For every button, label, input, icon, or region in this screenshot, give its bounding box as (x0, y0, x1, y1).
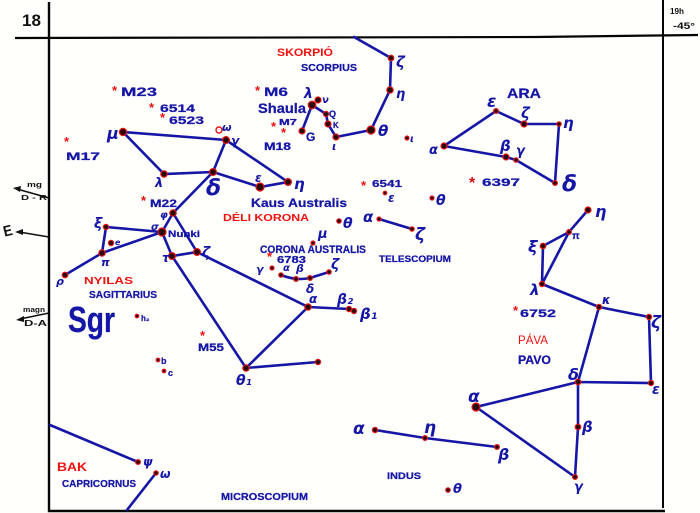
coordinate labels top right (670, 7, 696, 31)
constellation: Capricornus: BAK (57, 460, 87, 474)
deep-sky objects in Sagittarius: * (112, 83, 118, 98)
Sagittarius star labels: δ (206, 176, 221, 201)
Ara labels: α (429, 143, 438, 158)
constellation: Indus: θ (453, 482, 462, 497)
Pavo labels: γ (574, 480, 584, 495)
Sagittarius star labels: β₁ (359, 305, 377, 323)
arrow: D-A magnitude (16, 307, 49, 328)
arrows on left margin (1, 182, 49, 328)
Scorpius star labels: η (396, 87, 405, 102)
Scorpius names and clusters (255, 46, 357, 153)
constellation: Corona Australis: β (295, 262, 304, 275)
Ara labels: η (563, 114, 574, 132)
Sagittarius star labels: μ (106, 124, 119, 143)
arrow: D-R magnitude: D - R (21, 195, 47, 202)
constellation: Corona Australis: α (283, 263, 290, 274)
Ara labels: ε (487, 92, 496, 112)
Pavo labels: * (513, 303, 519, 318)
Sagittarius star labels: α (309, 292, 318, 306)
Sagittarius figure lines (65, 132, 354, 368)
constellation: Indus: α (353, 419, 365, 439)
constellation: Corona Australis: ζ (331, 257, 340, 273)
constellation: Corona Australis: CORONA AUSTRALIS (260, 244, 366, 256)
Pavo labels (468, 202, 662, 495)
Scorpius names and clusters: SKORPIÓ (277, 46, 333, 59)
constellation: Capricornus: ψ (143, 455, 153, 469)
Scorpius stars (299, 55, 409, 140)
coordinate labels top right: -45° (673, 21, 696, 31)
field objects between Scorpius and Pavo: 6541 (372, 179, 403, 190)
Scorpius figure lines (302, 37, 391, 137)
Scorpius star labels: K (333, 121, 339, 130)
Scorpius star labels: G (306, 130, 315, 144)
Ara labels: ARA (507, 85, 541, 101)
Sagittarius star labels: τ (162, 251, 170, 265)
field objects between Scorpius and Pavo: θ (436, 193, 446, 209)
constellation: Telescopium: α (363, 208, 374, 226)
Scorpius star labels: ν (322, 95, 329, 106)
Scorpius star labels: ι (332, 140, 336, 153)
constellation: Corona Australis: μ (317, 227, 328, 242)
Sagittarius names: Kaus Australis (251, 196, 347, 210)
field objects between Scorpius and Pavo: * (469, 175, 476, 192)
Scorpius star labels: λ (303, 86, 313, 102)
Pavo labels: 6752 (520, 308, 556, 320)
arrow: D-A magnitude: D-A (24, 319, 47, 328)
constellation: Capricornus (50, 425, 171, 510)
deep-sky objects in Sagittarius: M17 (66, 151, 100, 163)
Sagittarius star labels: ξ (94, 216, 103, 232)
Ara labels: δ (562, 172, 577, 197)
arrow: ecliptic (1, 222, 49, 241)
constellation: Corona Australis: θ (343, 216, 353, 232)
Pavo labels: π (572, 231, 580, 242)
deep-sky objects in Sagittarius: 6523 (169, 115, 204, 127)
Pavo figure lines (476, 210, 651, 477)
Sagittarius stars (62, 127, 357, 373)
deep-sky objects in Sagittarius: * (160, 110, 166, 125)
Ara figure lines (444, 111, 559, 183)
Scorpius star labels: ζ (396, 53, 406, 71)
constellation: Indus: β (497, 445, 509, 464)
deep-sky objects in Sagittarius: M23 (121, 85, 158, 99)
Sagittarius star labels: h₂ (141, 314, 150, 323)
deep-sky objects in Sagittarius: 6514 (160, 103, 196, 115)
Pavo labels: λ (529, 281, 540, 299)
Sagittarius star labels: ε (255, 171, 262, 185)
field objects between Scorpius and Pavo: * (361, 178, 367, 193)
constellation: Corona Australis: * (267, 249, 273, 264)
Pavo labels: PÁVA (518, 332, 548, 347)
Scorpius star labels: Q (329, 109, 336, 119)
Ara labels: β (499, 137, 511, 155)
Pavo labels: ξ (528, 237, 539, 256)
Scorpius names and clusters: M7 (279, 118, 298, 127)
Pavo labels: ε (652, 382, 660, 398)
Sagittarius star labels: ω (222, 121, 232, 134)
deep-sky objects in Sagittarius: * (141, 193, 147, 208)
Scorpius names and clusters: M18 (264, 141, 291, 153)
Ara labels (429, 85, 577, 197)
constellation: Indus: η (424, 418, 436, 438)
Scorpius names and clusters: M6 (264, 85, 288, 99)
constellation: Capricornus: ω (160, 467, 171, 481)
Sagittarius star labels: ρ (56, 275, 64, 288)
Sagittarius star labels: σ (151, 222, 159, 233)
Pavo labels: PAVO (518, 353, 551, 367)
Pavo labels: δ (568, 365, 579, 384)
Pavo labels: ζ (651, 313, 662, 333)
constellation: Ara (429, 85, 577, 197)
arrow: ecliptic: E (1, 222, 14, 241)
Sagittarius star labels: ζ (202, 245, 211, 261)
Pavo labels: κ (602, 293, 611, 307)
Scorpius names and clusters: Shaula (258, 100, 306, 116)
constellation: Corona Australis (256, 216, 366, 296)
Pavo labels: β (581, 418, 593, 436)
Sagittarius star labels: c (168, 368, 173, 378)
deep-sky objects in Sagittarius (64, 83, 224, 354)
deep-sky objects in Sagittarius: * (64, 134, 70, 149)
Sagittarius star labels: π (101, 256, 110, 269)
Scorpius names and clusters: * (281, 125, 287, 140)
constellation: Sagittarius (56, 121, 377, 389)
coordinate labels top right: 19h (670, 7, 684, 16)
label: Microscopium: MICROSCOPIUM (221, 492, 308, 503)
Sagittarius star labels: b (161, 356, 167, 366)
Sagittarius star labels: θ₁ (236, 373, 252, 389)
arrow: D-R magnitude: mg (27, 182, 42, 189)
Sagittarius star labels: γ (231, 134, 240, 148)
constellation: Corona Australis: δ (306, 282, 314, 296)
Scorpius names and clusters: * (271, 119, 277, 134)
constellation: Pavo (468, 202, 662, 495)
Sagittarius names: Sgr (68, 299, 115, 340)
constellation: Indus: INDUS (387, 471, 421, 482)
deep-sky objects in Sagittarius: * (149, 100, 155, 115)
Scorpius names and clusters: * (255, 83, 261, 98)
Sagittarius star labels (56, 121, 377, 389)
Sagittarius star labels: φ (160, 210, 168, 221)
Sagittarius star labels: η (294, 175, 305, 193)
Sagittarius names: NYILAS (84, 276, 133, 287)
Sagittarius names: SAGITTARIUS (89, 290, 157, 301)
constellation: Corona Australis: 6783 (277, 255, 307, 266)
arrow: D-A magnitude: magn (23, 307, 45, 314)
arrow: D-R magnitude (13, 182, 49, 202)
Sagittarius star labels: β₂ (336, 292, 354, 308)
field objects between Scorpius and Pavo: ε (388, 191, 395, 205)
Sagittarius star labels: λ (154, 176, 163, 191)
constellation: Telescopium: TELESCOPIUM (379, 254, 451, 265)
field objects between Scorpius and Pavo (361, 175, 520, 209)
Scorpius star labels: ι (410, 134, 414, 145)
Scorpius star labels: θ (378, 122, 388, 140)
Pavo labels: α (468, 387, 480, 407)
heading: right ascension 18: 18 (22, 11, 41, 30)
constellation: Telescopium: ζ (415, 225, 426, 245)
Sagittarius names: DÉLI KORONA (223, 211, 309, 224)
constellation: Telescopium (363, 208, 451, 265)
constellation: Indus (353, 418, 509, 497)
Sagittarius star labels: Nunki (168, 229, 200, 239)
deep-sky objects in Sagittarius: M55 (198, 342, 224, 354)
Scorpius star labels (303, 53, 414, 153)
Sagittarius star labels: e (115, 238, 121, 247)
constellation: Corona Australis: γ (256, 263, 265, 276)
Scorpius names and clusters: SCORPIUS (301, 63, 357, 74)
constellation: Capricornus: CAPRICORNUS (62, 479, 136, 490)
field objects between Scorpius and Pavo: 6397 (482, 177, 520, 189)
deep-sky objects in Sagittarius: M22 (150, 198, 177, 210)
Ara stars (441, 109, 561, 185)
constellation: Scorpius (255, 37, 414, 153)
Ara labels: ζ (521, 104, 531, 122)
Pavo stars (472, 207, 654, 479)
deep-sky objects in Sagittarius: * (200, 328, 206, 343)
Ara labels: γ (516, 144, 526, 159)
Sagittarius names (68, 196, 347, 340)
Pavo labels: η (595, 202, 606, 221)
